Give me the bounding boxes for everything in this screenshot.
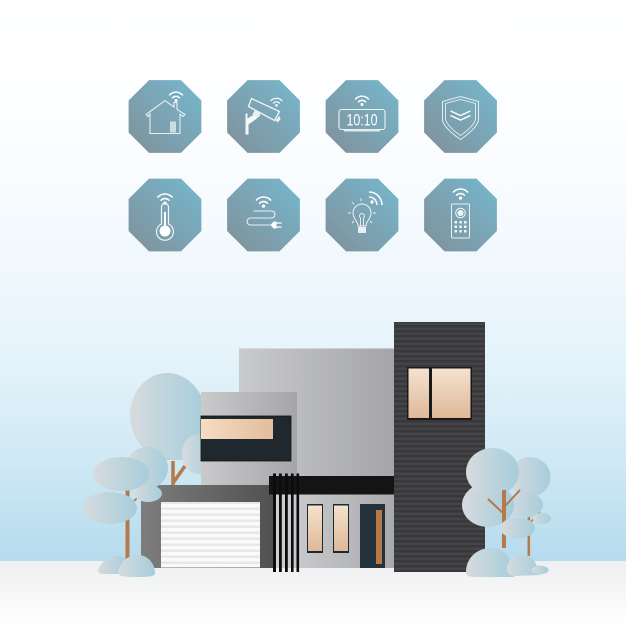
left tree (83, 447, 168, 560)
icon: digital alarm clock (326, 80, 398, 153)
right front tree (462, 448, 535, 548)
front door (360, 504, 385, 568)
icon: smart house (129, 80, 201, 153)
lower entrance wall (274, 494, 394, 568)
large tree behind house (130, 373, 214, 485)
icon: smart thermometer (129, 179, 201, 251)
black canopy band (269, 476, 394, 494)
ground (0, 561, 626, 626)
icon: smart light bulb (326, 179, 398, 251)
right bushes (466, 548, 548, 577)
icon: smart plug cable (227, 179, 300, 251)
black vertical slats (273, 474, 299, 572)
entrance window right (333, 504, 349, 553)
icon: security shield (424, 80, 497, 153)
icon: smart remote (424, 179, 497, 251)
icon: security camera (227, 80, 300, 153)
left bushes (98, 555, 155, 577)
dark tower (394, 322, 485, 572)
upper gray volume (239, 348, 394, 476)
entrance window left (307, 504, 323, 553)
garage (141, 485, 276, 568)
right back tree (507, 457, 551, 556)
icon: digital alarm clock: 10:10 (346, 110, 378, 130)
upper left block with window (201, 392, 297, 486)
